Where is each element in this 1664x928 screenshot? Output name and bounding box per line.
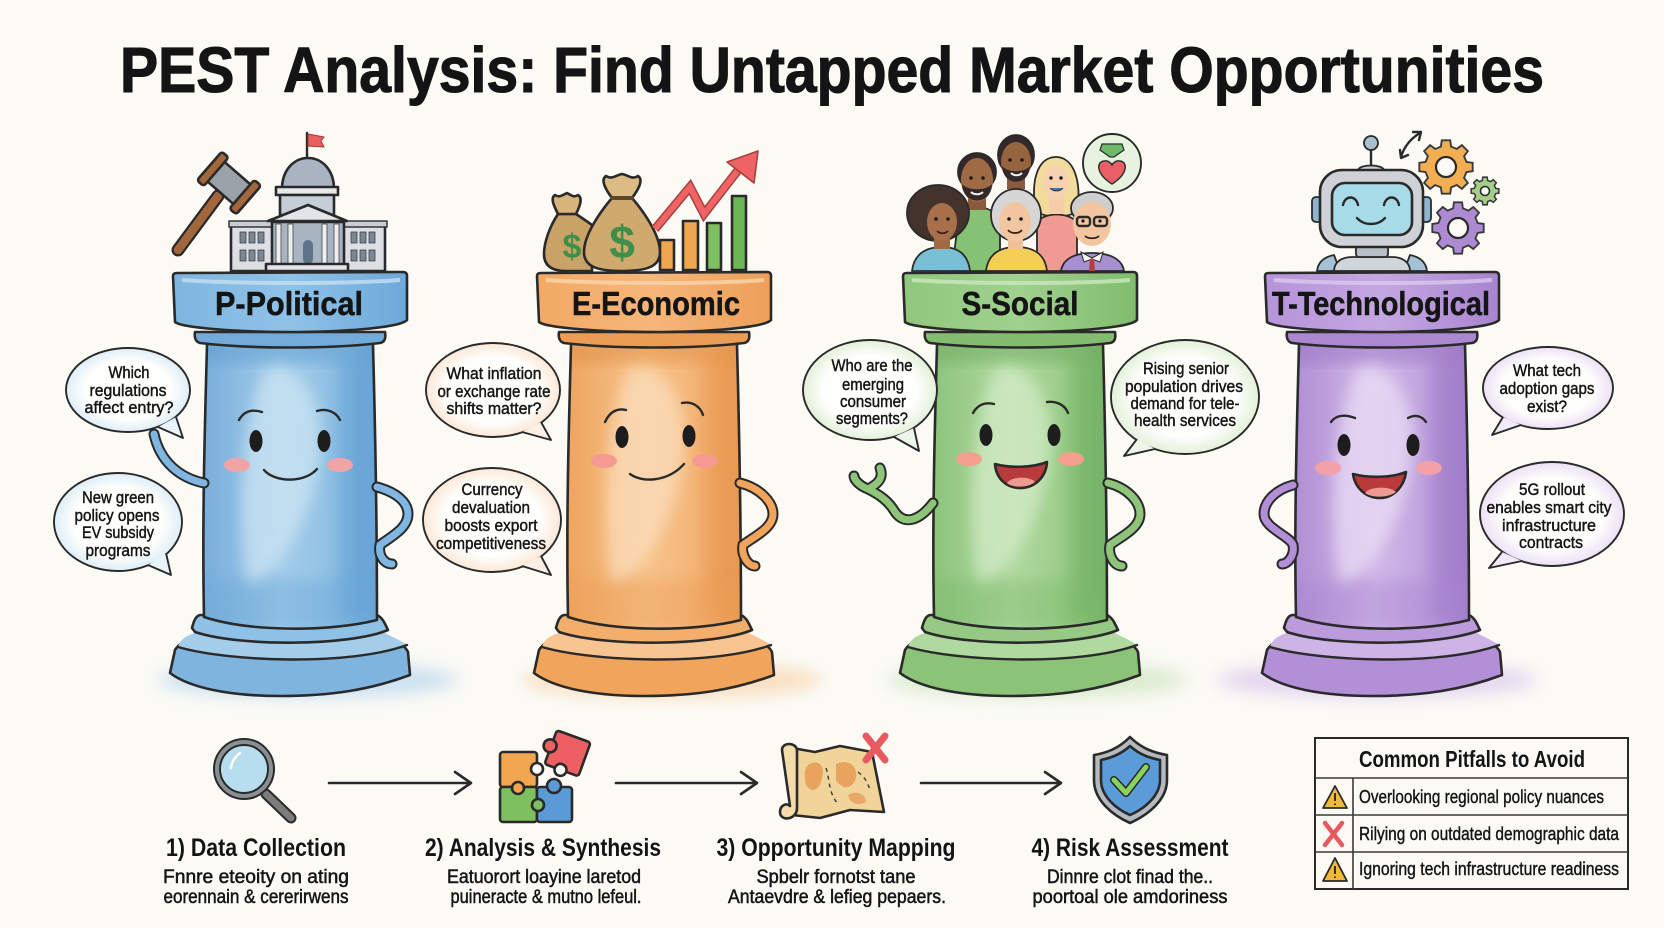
step description: Antaevdre & lefieg pepaers.	[728, 887, 946, 908]
arms	[154, 434, 408, 564]
step description	[728, 867, 946, 908]
pillar label: E-Economic: E-Economic	[572, 285, 740, 322]
thought bubble: heart	[1083, 134, 1141, 192]
arrow: step 1 to 2	[329, 772, 471, 794]
person: blonde woman, pink shirt	[1034, 157, 1078, 271]
step description: puineracte & mutno lefeul.	[450, 887, 642, 908]
process step 2: analysis and synthesis	[425, 728, 661, 908]
step description	[163, 867, 349, 908]
speech bubble: opportunity: New green	[82, 488, 154, 507]
icon: capitol building	[229, 133, 387, 271]
speech bubble: opportunity	[423, 468, 561, 575]
speech bubble: opportunity: 5G rollout	[1519, 480, 1585, 499]
speech bubble: opportunity	[1111, 340, 1259, 456]
pillar: green column	[888, 272, 1188, 698]
speech bubble: opportunity: infrastructure	[1502, 516, 1596, 535]
row 2: error: Rilying on outdated demographic data	[1359, 824, 1620, 844]
speech bubble: opportunity: Rising senior	[1143, 359, 1229, 378]
person: curly-haired woman, blue shirt	[907, 185, 970, 271]
person: older man with glasses, purple shirt	[1061, 192, 1124, 271]
icon: diverse consumer group	[907, 134, 1141, 271]
pillar label: T-Technological: T-Technological	[1272, 285, 1490, 322]
arm	[740, 483, 773, 566]
face: smiling	[591, 403, 718, 480]
speech bubble: question: What tech	[1513, 361, 1581, 380]
speech bubble: question: affect entry?	[84, 398, 174, 417]
step title: 4) Risk Assessment	[1032, 834, 1229, 862]
speech bubble: question: exist?	[1527, 397, 1567, 416]
arrow: step 2 to 3	[616, 772, 757, 794]
row 3: warning	[1323, 858, 1619, 881]
step description: eorennain & cererirwens	[164, 887, 348, 908]
speech bubble: opportunity	[54, 473, 182, 575]
speech bubble: opportunity: programs	[86, 541, 150, 560]
icon: treasure map	[780, 736, 885, 818]
step title: 3) Opportunity Mapping	[716, 834, 956, 862]
person: grey-haired woman, yellow shirt	[986, 189, 1047, 271]
pillar: blue column	[158, 272, 458, 698]
person: bearded man, back	[998, 135, 1034, 189]
speech bubble: opportunity: enables smart city	[1486, 498, 1612, 517]
speech bubble: opportunity: competitiveness	[436, 534, 546, 553]
icon: gavel	[178, 152, 261, 250]
panel: Technological pillar	[1217, 132, 1624, 698]
panel: Economic pillar	[423, 151, 822, 698]
speech bubble: question: or exchange rate	[438, 382, 550, 401]
speech bubble: opportunity: policy opens	[74, 506, 160, 525]
pillar label: S-Social: S-Social	[962, 285, 1078, 322]
speech bubble: opportunity: boosts export	[444, 516, 538, 535]
speech bubble: question	[66, 348, 190, 438]
speech bubble: question: regulations	[90, 381, 166, 400]
step description: Dinnre clot finad the..	[1047, 867, 1213, 888]
speech bubble: opportunity: population drives	[1125, 377, 1243, 396]
row 1: warning: Overlooking regional policy nuances	[1359, 787, 1604, 807]
speech bubble: question: Who are the	[832, 356, 912, 375]
speech bubble: question: What inflation	[446, 364, 542, 383]
row 1: warning	[1323, 786, 1604, 808]
pillar label: P-Political: P-Political	[215, 285, 363, 322]
arm	[1264, 485, 1293, 564]
table heading: Common Pitfalls to Avoid	[1359, 746, 1585, 772]
speech bubble: question	[803, 340, 937, 451]
icon: puzzle pieces	[500, 728, 591, 822]
icon: gears and cycle arrow	[1400, 132, 1499, 254]
icon: money bags	[544, 174, 660, 271]
arrow: step 3 to 4	[921, 772, 1061, 794]
pillar: orange column	[522, 272, 822, 698]
step title: 1) Data Collection	[166, 834, 346, 862]
row 3: warning: Ignoring tech infrastructure readiness	[1359, 859, 1619, 879]
step description: Eatuorort loayine laretod	[447, 867, 641, 888]
speech bubble: question: segments?	[836, 409, 908, 428]
face: smiling	[224, 410, 353, 480]
step description: poortoal ole amdoriness	[1032, 887, 1228, 908]
face: laughing	[1315, 416, 1442, 498]
icon: money bags: $	[609, 216, 635, 268]
step description: Spbelr fornotst tane	[756, 867, 916, 888]
speech bubble: question: adoption gaps	[1500, 379, 1594, 398]
step title: 2) Analysis & Synthesis	[425, 834, 661, 862]
speech bubble: question: shifts matter?	[446, 399, 542, 418]
person: bearded man, green shirt	[952, 153, 1000, 271]
speech bubble: opportunity: health services	[1134, 411, 1236, 430]
arms	[854, 468, 1140, 566]
speech bubble: question: emerging	[842, 375, 904, 394]
step description: Fnnre eteoity on ating	[163, 867, 349, 888]
process step 3: opportunity mapping	[716, 736, 956, 908]
face: laughing	[956, 402, 1084, 488]
step description	[1032, 867, 1228, 908]
icon: growth chart with rising arrow	[655, 151, 758, 270]
icon: money bags: $	[563, 228, 582, 266]
speech bubble: opportunity: contracts	[1519, 533, 1583, 552]
panel: common pitfalls table	[1315, 738, 1628, 889]
speech bubble: question	[426, 343, 560, 440]
process step 4: risk assessment	[1032, 737, 1229, 908]
panel: Political pillar	[54, 133, 458, 698]
speech bubble: opportunity: devaluation	[452, 498, 530, 517]
pillar: purple column	[1217, 272, 1537, 698]
step description	[447, 867, 642, 908]
icon: shield with check	[1094, 737, 1167, 823]
speech bubble: question	[1483, 347, 1613, 435]
icon: robot	[1312, 136, 1431, 271]
speech bubble: opportunity: Currency	[462, 480, 523, 499]
speech bubble: question: Which	[108, 363, 150, 382]
panel: Social pillar	[803, 134, 1259, 698]
process step 1: data collection	[163, 742, 349, 908]
speech bubble: opportunity	[1480, 462, 1624, 568]
icon: magnifying glass	[217, 742, 291, 818]
speech bubble: opportunity: EV subsidy	[82, 523, 154, 542]
speech bubble: question: consumer	[840, 392, 906, 411]
speech bubble: opportunity: demand for tele-	[1130, 394, 1240, 413]
